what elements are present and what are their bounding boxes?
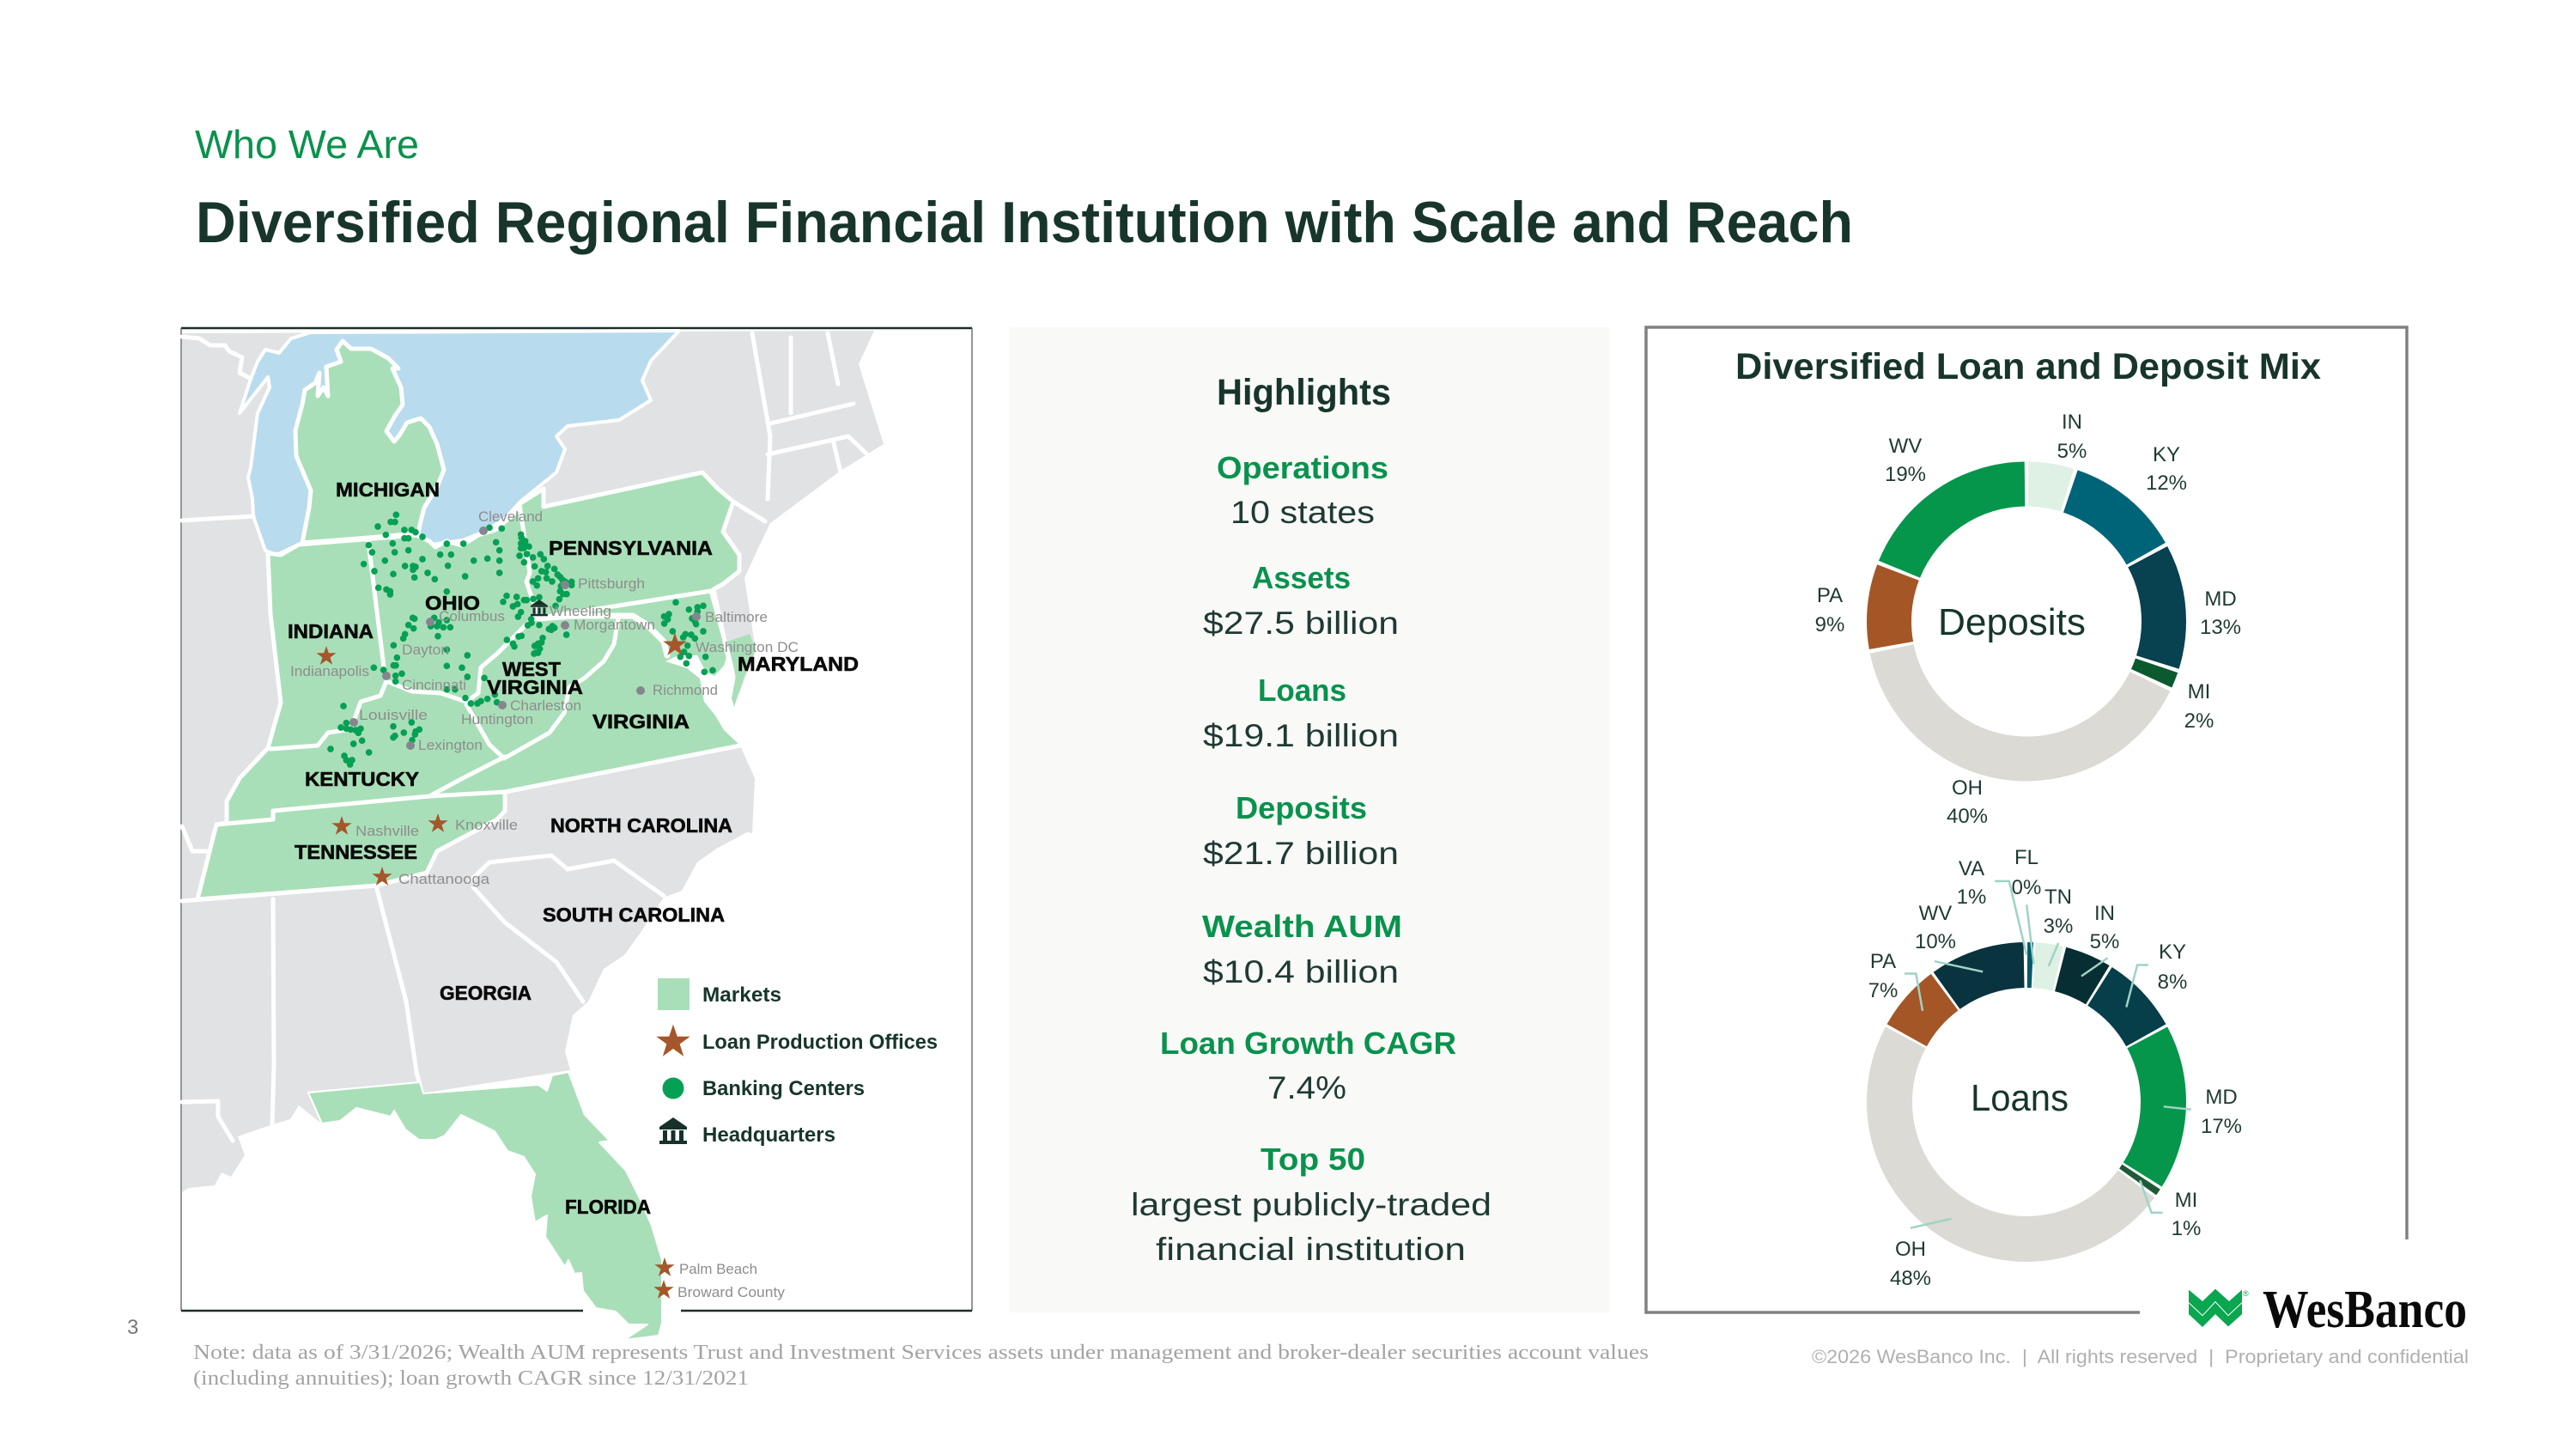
page number: 3: [127, 1316, 138, 1339]
registered mark: ®: [2243, 1289, 2249, 1298]
deposits ring: [1889, 484, 2164, 759]
loans data labels: KY: [2159, 941, 2186, 964]
water: great lakes: [240, 331, 679, 555]
deposits data labels: KY: [2153, 443, 2180, 466]
loans data labels: 10%: [1915, 930, 1956, 953]
panel heading: Diversified Loan and Deposit Mix: [1735, 346, 2321, 387]
loans data labels: TN: [2044, 886, 2072, 909]
highlight: top 50: financial institution: [1156, 1232, 1466, 1267]
deposits data labels: 2%: [2184, 709, 2214, 733]
city labels: Broward County: [677, 1284, 786, 1300]
highlight: top 50: Top 50: [1261, 1142, 1365, 1177]
state labels: OHIO: [425, 592, 480, 614]
highlight: operations: Operations: [1217, 450, 1388, 485]
highlight: loans: Loans: [1258, 673, 1346, 708]
copyright: ©2026 WesBanco Inc. | All rights reserved | Proprietary and confidential: [1812, 1346, 2469, 1367]
loans data labels: 1%: [1957, 886, 1986, 909]
city labels: Knoxville: [455, 817, 518, 833]
deposits data labels: 5%: [2057, 440, 2087, 463]
legend: headquarters: Headquarters: [702, 1123, 835, 1147]
state labels: FLORIDA: [565, 1196, 651, 1218]
loans data labels: IN: [2094, 902, 2115, 925]
loans data labels: 0%: [2012, 876, 2041, 899]
panel frame: [1646, 327, 2407, 1312]
city labels: Columbus: [439, 608, 505, 624]
city labels: Washington DC: [696, 639, 799, 655]
market: eastern shore: [727, 634, 756, 707]
deposits data labels: WV: [1889, 435, 1922, 458]
state borders: market states: [216, 504, 724, 825]
deposits data labels: MD: [2204, 588, 2237, 611]
city labels: Wheeling: [550, 603, 611, 619]
wordmark: WesBanco: [2263, 1281, 2467, 1339]
highlights heading: Highlights: [1217, 372, 1391, 413]
highlight: wealth aum: Wealth AUM: [1202, 909, 1402, 944]
legend: markets: [658, 978, 781, 1010]
city labels: [290, 508, 799, 1300]
city labels: Cleveland: [478, 508, 543, 525]
icon: headquarters: [531, 600, 548, 616]
section label: Who We Are: [195, 122, 419, 167]
highlight: loans: [1203, 673, 1399, 753]
loans data labels: 1%: [2172, 1217, 2201, 1240]
legend: headquarters: [659, 1117, 835, 1147]
highlight: loans: $19.1 billion: [1203, 718, 1399, 753]
city labels: Indianapolis: [290, 663, 369, 679]
city labels: Cincinnati: [402, 677, 466, 693]
deposits data labels: MI: [2188, 680, 2210, 703]
highlight: wealth aum: $10.4 billion: [1203, 954, 1399, 989]
markets: footprint states: [197, 341, 740, 1340]
deposits data labels: OH: [1952, 776, 1983, 800]
city markers: [349, 527, 701, 750]
highlight: loan growth cagr: [1160, 1026, 1456, 1105]
highlight: deposits: $21.7 billion: [1203, 836, 1399, 871]
highlight: top 50: largest publicly-traded: [1131, 1187, 1492, 1222]
city labels: Huntington: [461, 711, 533, 728]
loans data labels: 3%: [2044, 915, 2073, 938]
deposits data labels: [1815, 411, 2241, 828]
state labels: GEORGIA: [440, 982, 532, 1004]
loans data labels: VA: [1959, 857, 1984, 880]
loans data labels: MD: [2205, 1086, 2238, 1109]
city labels: Palm Beach: [679, 1261, 757, 1277]
highlight: assets: [1203, 560, 1399, 641]
deposits center label: Deposits: [1938, 601, 2086, 643]
highlight: operations: [1217, 450, 1388, 530]
highlight: operations: 10 states: [1230, 495, 1375, 530]
state labels: MICHIGAN: [336, 478, 440, 501]
state labels: VIRGINIA: [487, 676, 583, 698]
panel: footprint map: [181, 328, 972, 1340]
land: surrounding states: [182, 331, 884, 1192]
deposits data labels: IN: [2062, 411, 2082, 434]
city labels: Chattanooga: [398, 871, 490, 887]
state borders: non-market states: [182, 333, 869, 1141]
legend: markets: Markets: [702, 983, 781, 1007]
highlight: deposits: [1203, 790, 1399, 871]
legend: loan production offices: Loan Production Offices: [702, 1031, 938, 1054]
chart: deposits donut: [1815, 411, 2241, 828]
loans ring: [1889, 965, 2164, 1239]
loans data labels: 5%: [2090, 930, 2119, 953]
title: Diversified Regional Financial Institution with Scale and Reach: [196, 190, 1853, 255]
city labels: Baltimore: [705, 609, 768, 625]
state labels: WEST: [502, 658, 561, 680]
loans data labels: OH: [1895, 1238, 1926, 1261]
deposits data labels: 12%: [2146, 472, 2187, 495]
state labels: [288, 478, 859, 1218]
legend: banking centers: Banking Centers: [702, 1077, 865, 1100]
deposits data labels: 9%: [1815, 613, 1844, 636]
city labels: Nashville: [355, 823, 419, 839]
state labels: MARYLAND: [738, 653, 859, 675]
map frame: [181, 328, 972, 1311]
highlight: assets: Assets: [1252, 560, 1351, 595]
city labels: Richmond: [653, 682, 718, 698]
loans data labels: 48%: [1890, 1267, 1931, 1290]
loans center label: Loans: [1971, 1077, 2069, 1119]
map legend: [656, 978, 938, 1147]
chart: loans donut: [1868, 846, 2242, 1290]
banking center dots: [331, 514, 713, 764]
city labels: Dayton: [402, 642, 449, 658]
loans leader lines: [1905, 881, 2191, 1228]
water: chesapeake bay: [665, 644, 740, 746]
footnote: (including annuities); loan growth CAGR since 12/31/2021: [193, 1367, 749, 1390]
city labels: Lexington: [418, 737, 483, 753]
state labels: INDIANA: [288, 620, 374, 642]
loans data labels: MI: [2175, 1189, 2197, 1212]
city labels: Louisville: [359, 707, 428, 723]
highlight: wealth aum: [1202, 909, 1402, 989]
loans data labels: [1868, 846, 2242, 1290]
logo mark: [2189, 1289, 2242, 1327]
legend: loan production offices: [656, 1025, 938, 1056]
highlight: loan growth cagr: Loan Growth CAGR: [1160, 1026, 1456, 1061]
panel: loan and deposit mix: [1646, 327, 2407, 1312]
deposits data labels: 40%: [1947, 805, 1988, 828]
deposits data labels: 19%: [1885, 463, 1926, 486]
highlight: deposits: Deposits: [1236, 790, 1367, 825]
highlight: assets: $27.5 billion: [1203, 606, 1399, 641]
loan production office stars: [316, 633, 687, 1299]
loans data labels: 8%: [2158, 971, 2187, 994]
deposits data labels: PA: [1817, 584, 1843, 607]
loans data labels: FL: [2014, 846, 2038, 869]
highlights background: [1009, 327, 1609, 1312]
state labels: PENNSYLVANIA: [549, 537, 713, 559]
city labels: Pittsburgh: [578, 575, 645, 592]
loans data labels: 7%: [1868, 979, 1898, 1002]
panel: highlights: [1009, 327, 1609, 1312]
loans data labels: PA: [1870, 950, 1896, 973]
state labels: TENNESSEE: [295, 841, 417, 863]
footnote: Note: data as of 3/31/2026; Wealth AUM represents Trust and Investment Services assets under management and broker-dealer securities account values: [193, 1342, 1649, 1364]
state labels: KENTUCKY: [305, 768, 419, 790]
logo: wesbanco: [2189, 1281, 2467, 1339]
loans data labels: 17%: [2201, 1115, 2242, 1138]
highlight: loan growth cagr: 7.4%: [1267, 1070, 1346, 1105]
state labels: SOUTH CAROLINA: [543, 904, 725, 926]
state labels: VIRGINIA: [592, 710, 690, 733]
city labels: Charleston: [510, 697, 581, 714]
footnote: [193, 1342, 1649, 1390]
loans data labels: WV: [1919, 902, 1952, 925]
state labels: NORTH CAROLINA: [550, 814, 732, 837]
highlight: top 50: [1131, 1142, 1492, 1267]
deposits data labels: 13%: [2200, 616, 2241, 639]
city labels: Morgantown: [574, 617, 655, 633]
